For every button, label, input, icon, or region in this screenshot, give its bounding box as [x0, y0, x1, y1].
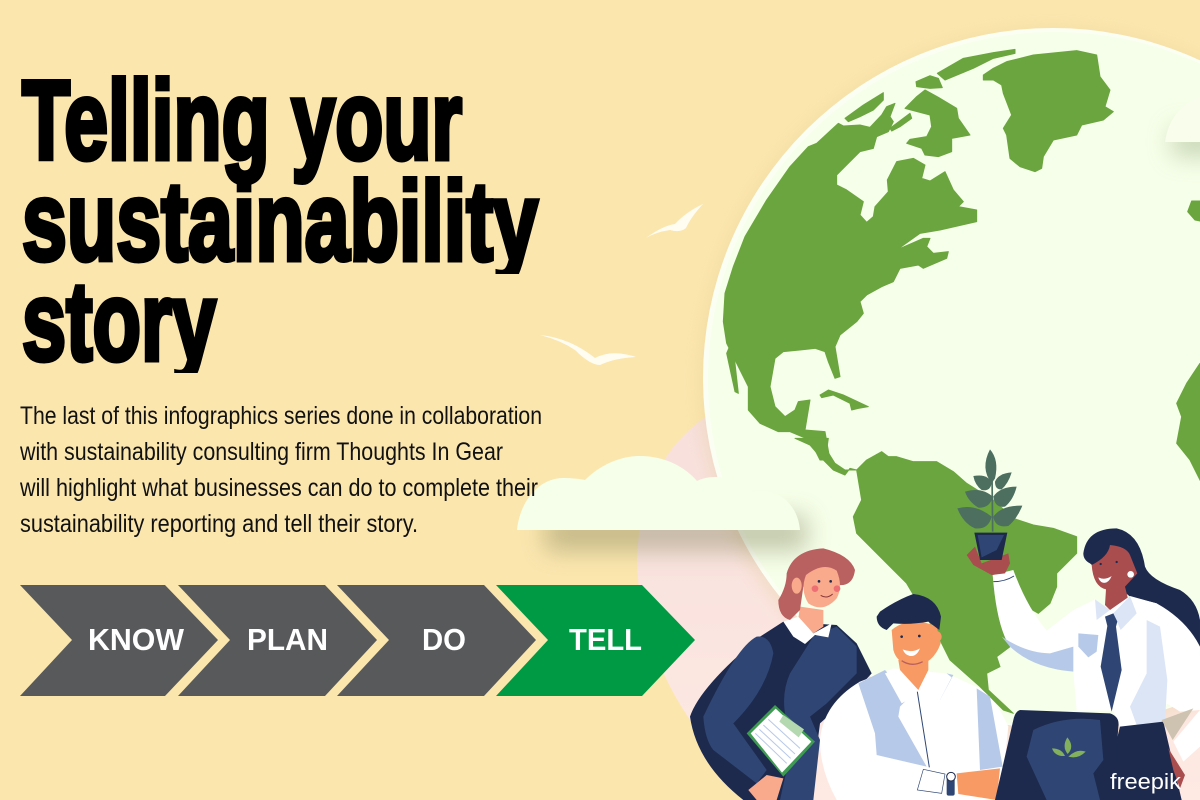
hand — [957, 768, 1000, 800]
chevron: KNOW — [20, 585, 218, 696]
continent: South America — [795, 438, 1077, 713]
title: sustainability — [22, 159, 538, 284]
hand — [748, 775, 783, 800]
title: story — [22, 259, 216, 384]
chevron: PLAN: PLAN — [247, 622, 328, 657]
neck and face — [1092, 545, 1137, 613]
main cloud — [517, 456, 807, 551]
cuff — [917, 769, 945, 793]
bird: lower — [540, 335, 636, 365]
sleeve strap line — [993, 576, 1014, 582]
title — [22, 58, 538, 384]
face — [892, 622, 941, 667]
right woman with plant — [957, 449, 1200, 800]
neck — [898, 657, 928, 690]
collar — [885, 670, 952, 703]
plant — [957, 449, 1022, 532]
title: Telling your — [22, 58, 462, 183]
hair back — [1083, 528, 1200, 700]
intro text: will highlight what businesses can do to complete their — [19, 474, 538, 502]
shirt — [993, 570, 1200, 727]
continents: North America and Arctic islands — [723, 49, 1200, 520]
bird: upper — [646, 204, 703, 238]
hand holding pot — [967, 547, 1010, 575]
chevron: KNOW: KNOW — [88, 622, 185, 657]
left woman with clipboard — [690, 548, 872, 800]
neck — [798, 607, 823, 633]
chevron: DO — [337, 585, 536, 696]
pink backdrop circle — [637, 405, 1200, 800]
process chevrons — [20, 585, 695, 696]
chevron: DO: DO — [422, 622, 466, 657]
collar — [783, 617, 832, 644]
hair — [877, 594, 941, 630]
zipper — [917, 692, 929, 767]
paper and hand at right edge — [1162, 708, 1193, 740]
chevron: TELL — [496, 585, 695, 696]
center man — [820, 594, 1008, 800]
hair — [778, 548, 855, 620]
clipboard — [747, 705, 815, 777]
people illustration — [690, 449, 1200, 800]
skirt — [1103, 722, 1182, 800]
plant pot — [974, 533, 1007, 560]
face — [803, 567, 840, 607]
shirt — [820, 668, 1008, 800]
intro text: The last of this infographics series done in collaboration — [20, 402, 542, 430]
intro text: sustainability reporting and tell their story. — [20, 510, 418, 538]
top-right cloud — [1165, 97, 1200, 156]
intro text — [19, 402, 542, 538]
globe — [699, 28, 1200, 736]
freepik credit: freepik — [1110, 769, 1182, 794]
chevron: PLAN — [178, 585, 377, 696]
intro text: with sustainability consulting firm Thoughts In Gear — [19, 438, 503, 466]
tie — [1101, 613, 1122, 712]
chevron: TELL: TELL — [569, 622, 642, 657]
laptop — [995, 710, 1119, 800]
watch — [947, 775, 955, 796]
